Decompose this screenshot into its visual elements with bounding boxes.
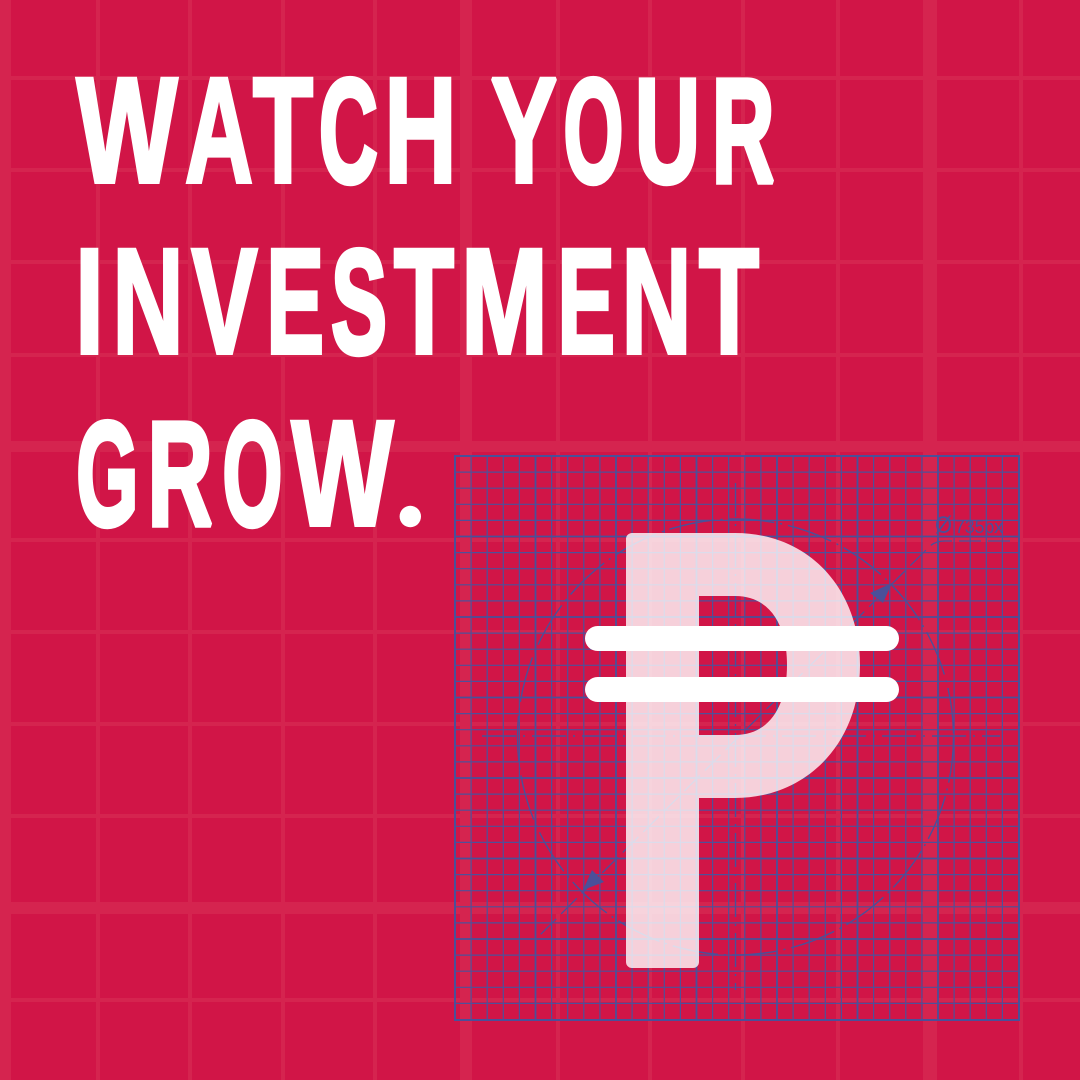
title: E xyxy=(557,217,615,385)
diameter label: Ø xyxy=(935,512,952,539)
title: T xyxy=(253,46,313,214)
title: R xyxy=(712,49,774,214)
title: Y xyxy=(490,46,557,214)
title: R xyxy=(148,392,213,557)
title: A xyxy=(185,46,253,214)
title: H xyxy=(384,46,457,214)
title xyxy=(75,46,774,557)
title: N xyxy=(622,217,692,385)
title: M xyxy=(461,217,548,385)
construction circle and centre lines xyxy=(482,483,1000,990)
title: C xyxy=(319,49,378,214)
title: T xyxy=(394,217,454,385)
title: I xyxy=(75,217,104,385)
icon: peso sign letter P xyxy=(626,533,860,968)
title: S xyxy=(331,220,387,385)
title: N xyxy=(112,217,184,385)
title: W xyxy=(77,46,178,214)
title: G xyxy=(76,392,138,557)
diameter label: 735px xyxy=(955,517,1003,537)
title: T xyxy=(699,217,759,385)
title: O xyxy=(564,49,623,214)
icon: peso sign bars xyxy=(585,626,899,702)
title: E xyxy=(266,217,324,385)
title: O xyxy=(223,392,282,557)
title: W xyxy=(292,389,394,557)
diameter line with arrows xyxy=(540,541,1010,935)
blueprint grid xyxy=(455,456,1019,1020)
title: U xyxy=(635,49,700,214)
title: V xyxy=(192,217,258,385)
